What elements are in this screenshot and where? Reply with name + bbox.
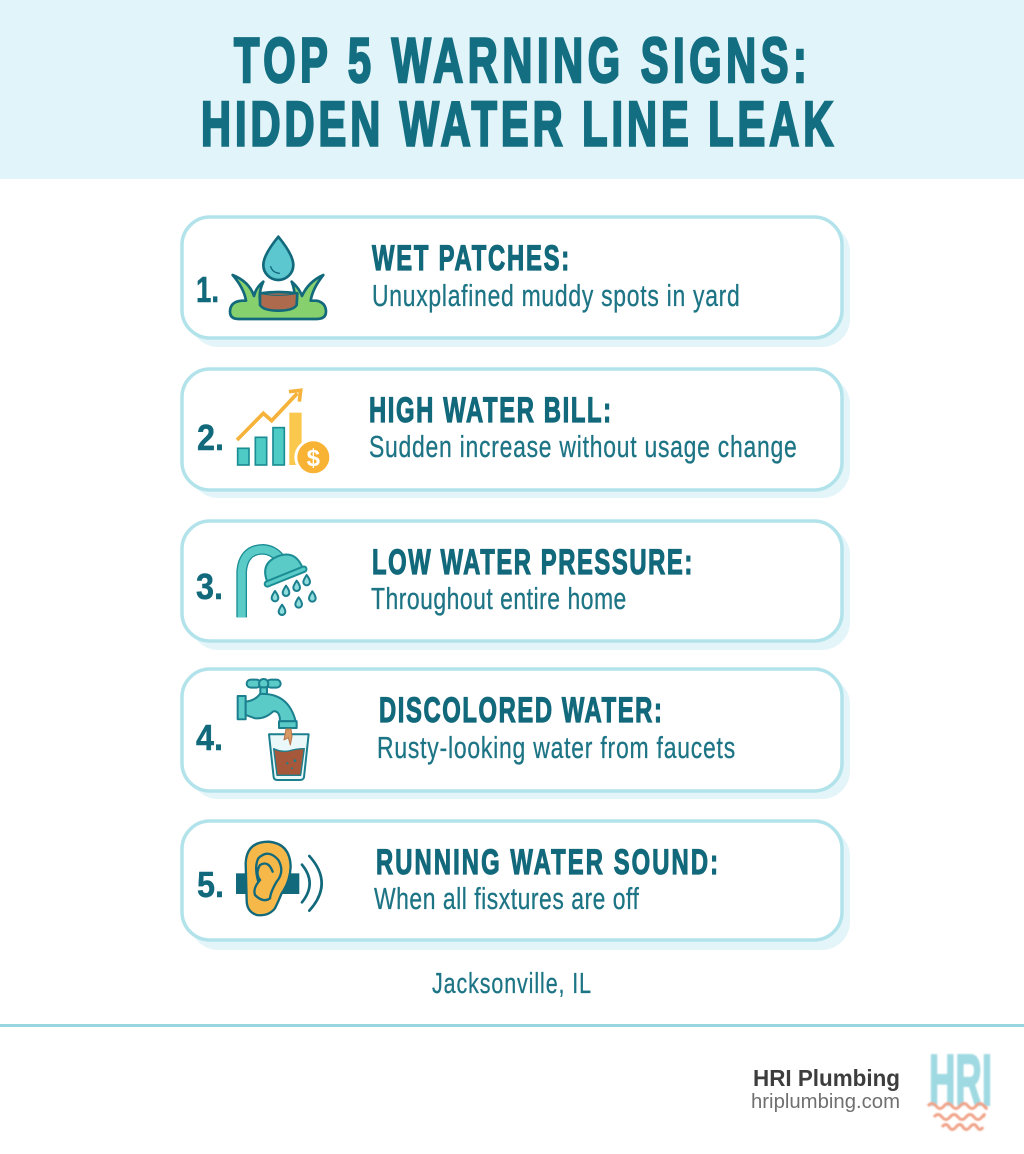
icon: ear with sound waves [236, 842, 322, 915]
title [201, 27, 834, 160]
heading: WET PATCHES: [372, 240, 569, 278]
header panel [0, 0, 1024, 179]
footer brand [751, 1041, 992, 1130]
heading: RUNNING WATER SOUND: [376, 844, 718, 882]
description: Rusty-looking water from faucets [377, 730, 735, 765]
title: TOP 5 WARNING SIGNS: [234, 27, 807, 96]
panel: wet patches [182, 217, 850, 347]
number 3: 3. [196, 566, 223, 607]
icon: rising bill chart with coin: $ [307, 445, 320, 472]
description: Throughout entire home [371, 581, 626, 616]
panel: running water sound [182, 821, 850, 950]
logo: HRI with waves [928, 1041, 992, 1130]
panel: discolored water [182, 669, 850, 799]
description: Sudden increase without usage change [369, 429, 797, 464]
number 2: 2. [197, 417, 224, 458]
icon: faucet and glass of rusty water [238, 679, 309, 780]
panel: high water bill [182, 369, 850, 498]
company name: HRI Plumbing [753, 1065, 900, 1091]
heading: LOW WATER PRESSURE: [372, 544, 692, 582]
icon: water drop on muddy grass [230, 237, 326, 319]
number 5: 5. [197, 864, 224, 905]
title: HIDDEN WATER LINE LEAK [201, 90, 834, 160]
heading: HIGH WATER BILL: [369, 392, 611, 430]
location label: Jacksonville, IL [432, 968, 591, 1000]
icon: rising bill chart with coin [237, 390, 331, 476]
heading: DISCOLORED WATER: [379, 692, 662, 730]
number 4: 4. [196, 717, 223, 758]
panel: low water pressure [182, 521, 850, 650]
description: Unuxplafined muddy spots in yard [372, 278, 740, 313]
icon: shower head with drops [242, 548, 316, 617]
website: hriplumbing.com [751, 1091, 900, 1113]
number 1: 1. [196, 269, 219, 310]
description: When all fisxtures are off [374, 881, 639, 916]
